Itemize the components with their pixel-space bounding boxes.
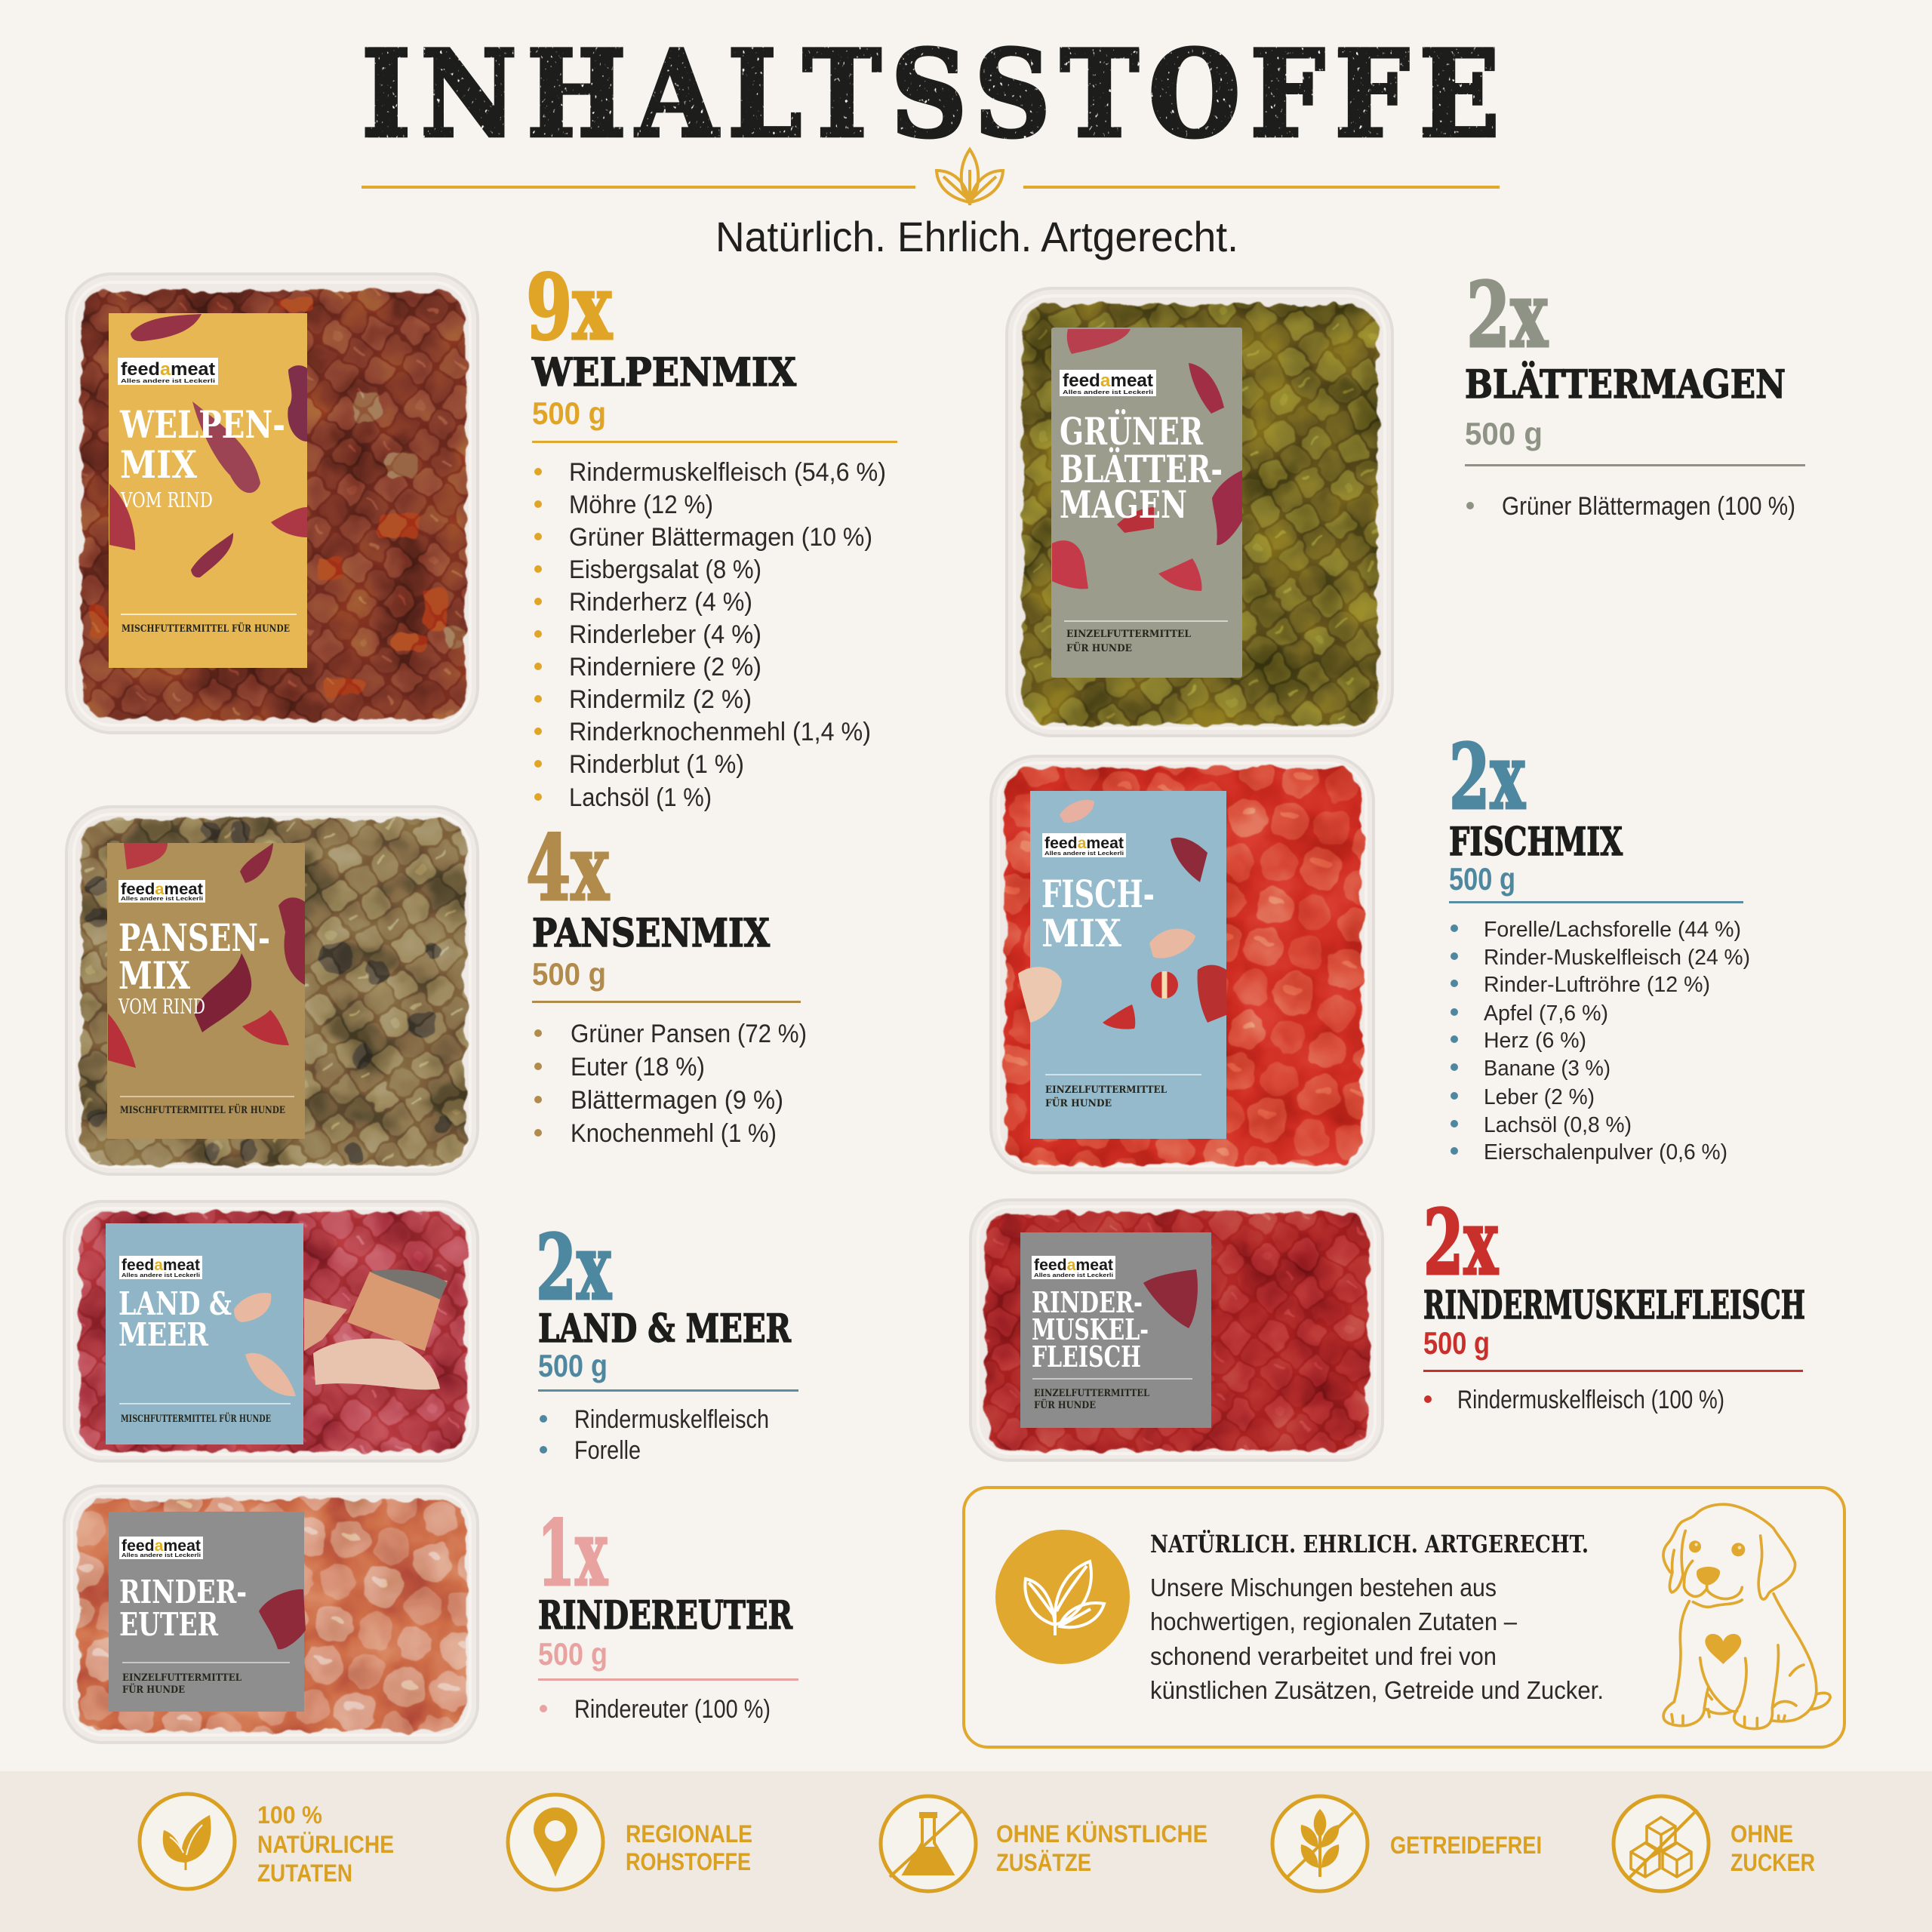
pack label: rindermuskelfleisch: [1020, 1232, 1211, 1428]
pack label: rindermuskelfleisch: EINZELFUTTERMITTEL: [1034, 1388, 1149, 1399]
callout body text: schonend verarbeitet und frei von: [1150, 1642, 1497, 1670]
product tray: rindereuter: [64, 1486, 478, 1743]
brand logo: feedameat: [1034, 1257, 1113, 1274]
section: rindermuskelfleisch: 500 g: [1423, 1325, 1490, 1361]
section: blaettermagen: BLÄTTERMAGEN: [1465, 361, 1786, 408]
ingredient list: fischmix: Banane (3 %): [1484, 1057, 1611, 1081]
brand logo: Alles andere ist Leckerli: [122, 1273, 200, 1278]
ingredient list: welpenmix: Rinderleber (4 %): [569, 620, 761, 649]
brand logo: Alles andere ist Leckerli: [122, 1553, 201, 1558]
badge: ohne kuenstliche zusaetze: ZUSÄTZE: [996, 1849, 1091, 1876]
callout body text: Unsere Mischungen bestehen aus: [1150, 1574, 1497, 1601]
callout body text: [1150, 1574, 1604, 1704]
pack label: fischmix: FÜR HUNDE: [1045, 1097, 1112, 1109]
icon: apple: [1151, 971, 1178, 998]
section: fischmix: 500 g: [1449, 861, 1515, 897]
pack label: gruener blaettermagen: EINZELFUTTERMITTEL: [1066, 629, 1191, 640]
product tray: fischmix: [991, 756, 1374, 1173]
brand logo: feedameat: [122, 1257, 200, 1274]
ingredient list: welpenmix: Lachsöl (1 %): [569, 783, 712, 812]
ingredient list: fischmix: Lachsöl (0,8 %): [1484, 1113, 1632, 1137]
section: pansenmix: [526, 816, 807, 1148]
pack label: rindereuter: RINDER-: [119, 1574, 247, 1611]
brand logo: [1042, 833, 1126, 857]
pack label: pansenmix: [107, 843, 305, 1139]
ingredient list: welpenmix: Rinderherz (4 %): [569, 588, 752, 617]
ingredient list: welpenmix: Möhre (12 %): [569, 491, 713, 519]
brand logo: feedameat: [121, 881, 203, 898]
callout panel: [964, 1487, 1844, 1747]
section: blaettermagen: 2x: [1466, 263, 1549, 368]
title divider with leaf: [361, 149, 1500, 205]
pack label: rindermuskelfleisch: FLEISCH: [1032, 1340, 1141, 1374]
ingredient list: fischmix: Rinder-Muskelfleisch (24 %): [1484, 946, 1750, 970]
product tray: rindermuskelfleisch: [971, 1200, 1383, 1460]
badge: ohne zucker: ZUCKER: [1730, 1849, 1815, 1876]
ingredient list: land und meer: [540, 1405, 769, 1465]
section: fischmix: FISCHMIX: [1449, 820, 1623, 865]
section: land und meer: [536, 1215, 798, 1465]
badge: natuerliche zutaten: ZUTATEN: [257, 1860, 352, 1887]
pack label: rindereuter: EINZELFUTTERMITTEL: [122, 1672, 242, 1684]
pack label: gruener blaettermagen: GRÜNER: [1060, 408, 1203, 454]
ingredient list: fischmix: Herz (6 %): [1484, 1029, 1586, 1053]
subtitle: Natürlich. Ehrlich. Artgerecht.: [715, 213, 1238, 260]
section: land und meer: 2x: [536, 1215, 612, 1321]
footer band: [0, 1771, 1932, 1932]
pack label: fischmix: EINZELFUTTERMITTEL: [1045, 1084, 1167, 1096]
ingredient list: pansenmix: [534, 1020, 807, 1148]
icon: leaves in circle: [995, 1530, 1130, 1664]
badge: regionale rohstoffe: ROHSTOFFE: [626, 1848, 751, 1875]
brand logo: feedameat: [121, 359, 215, 380]
pack label: pansenmix: VOM RIND: [118, 995, 205, 1019]
pack label: rindermuskelfleisch: RINDER-: [1032, 1285, 1143, 1319]
section: rindereuter: 1x: [537, 1501, 608, 1607]
pack label: welpenmix: WELPEN-: [119, 402, 285, 447]
badge: regionale rohstoffe: [508, 1795, 752, 1890]
product tray: land und meer: [64, 1201, 478, 1461]
pack label: rindermuskelfleisch: FÜR HUNDE: [1034, 1398, 1096, 1411]
brand logo: [1032, 1256, 1115, 1279]
pack label: fischmix: MIX: [1041, 911, 1121, 955]
section: blaettermagen: [1465, 263, 1805, 521]
section: fischmix: 2x: [1449, 724, 1526, 830]
ingredient list: land und meer: Rindermuskelfleisch: [574, 1405, 769, 1434]
badge: ohne zucker: OHNE: [1730, 1820, 1793, 1847]
pack label: pansenmix: MISCHFUTTERMITTEL FÜR HUNDE: [120, 1103, 285, 1116]
brand logo: Alles andere ist Leckerli: [1034, 1273, 1113, 1278]
ingredient list: welpenmix: Rinderniere (2 %): [569, 653, 761, 681]
section: rindereuter: 500 g: [538, 1636, 608, 1672]
title: INHALTSSTOFFE: [361, 25, 1500, 165]
pack label: rindereuter: EUTER: [119, 1606, 219, 1643]
pack label: fischmix: FISCH-: [1041, 872, 1155, 916]
section: rindermuskelfleisch: [1423, 1190, 1805, 1414]
section: welpenmix: WELPENMIX: [531, 350, 796, 395]
pack label: gruener blaettermagen: FÜR HUNDE: [1066, 641, 1132, 654]
pack label: welpenmix: MISCHFUTTERMITTEL FÜR HUNDE: [122, 622, 290, 635]
pack label: fischmix: [1018, 791, 1226, 1139]
section: blaettermagen: 500 g: [1465, 416, 1543, 451]
pack label: gruener blaettermagen: [1051, 328, 1242, 678]
ingredient list: fischmix: Rinder-Luftröhre (12 %): [1484, 973, 1710, 997]
section: welpenmix: 9x: [526, 255, 613, 361]
badge: ohne kuenstliche zusaetze: OHNE KÜNSTLICHE: [996, 1820, 1208, 1847]
ingredient list: pansenmix: Blättermagen (9 %): [571, 1086, 783, 1115]
section: pansenmix: 500 g: [532, 956, 606, 992]
product tray: pansenmix: [66, 807, 478, 1174]
section: pansenmix: PANSENMIX: [532, 911, 770, 956]
ingredient list: fischmix: Leber (2 %): [1484, 1085, 1595, 1109]
brand logo: feedameat: [1044, 835, 1124, 852]
brand logo: feedameat: [122, 1537, 201, 1555]
ingredient list: welpenmix: Grüner Blättermagen (10 %): [569, 523, 872, 552]
brand logo: Alles andere ist Leckerli: [1044, 851, 1124, 857]
ingredient list: land und meer: Forelle: [574, 1436, 641, 1465]
pack label: land und meer: MEER: [118, 1316, 209, 1353]
pack label: welpenmix: VOM RIND: [120, 489, 213, 512]
ingredient list: fischmix: Apfel (7,6 %): [1484, 1001, 1608, 1026]
section: fischmix: [1449, 724, 1750, 1164]
ingredient list: pansenmix: Euter (18 %): [571, 1053, 705, 1081]
pack label: land und meer: [106, 1223, 303, 1444]
pack label: pansenmix: MIX: [118, 953, 190, 998]
ingredient list: welpenmix: [534, 458, 886, 812]
pack label: gruener blaettermagen: BLÄTTER-: [1060, 446, 1223, 491]
callout heading: NATÜRLICH. EHRLICH. ARTGERECHT.: [1150, 1529, 1589, 1558]
ingredient list: pansenmix: Grüner Pansen (72 %): [571, 1020, 807, 1048]
section: welpenmix: 500 g: [532, 395, 606, 431]
badge: natuerliche zutaten: 100 %: [257, 1801, 322, 1829]
pack label: land und meer: MISCHFUTTERMITTEL FÜR HUNDE: [121, 1412, 271, 1425]
pack label: gruener blaettermagen: MAGEN: [1060, 482, 1187, 527]
section: rindermuskelfleisch: 2x: [1423, 1190, 1499, 1296]
pack label: welpenmix: MIX: [120, 442, 197, 487]
icon: puppy: [1663, 1504, 1830, 1729]
brand logo: [118, 358, 218, 385]
salmon pieces: [304, 1269, 448, 1390]
section: rindereuter: [537, 1501, 798, 1724]
badge: natuerliche zutaten: NATÜRLICHE: [257, 1831, 394, 1858]
section: welpenmix: [526, 255, 897, 812]
ingredient list: welpenmix: Eisbergsalat (8 %): [569, 555, 761, 584]
badge: getreidefrei: GETREIDEFREI: [1390, 1832, 1542, 1859]
ingredient list: rindereuter: Rindereuter (100 %): [574, 1695, 771, 1724]
badge: regionale rohstoffe: REGIONALE: [626, 1820, 752, 1847]
ingredient list: welpenmix: Rinderknochenmehl (1,4 %): [569, 718, 871, 746]
product tray: welpenmix: [66, 274, 478, 733]
pack label: rindereuter: [109, 1512, 306, 1712]
pack label: rindereuter: FÜR HUNDE: [122, 1683, 185, 1696]
brand logo: Alles andere ist Leckerli: [121, 897, 203, 902]
badge: ohne kuenstliche zusaetze: [881, 1796, 1208, 1891]
ingredient list: rindermuskelfleisch: Rindermuskelfleisch (100 %): [1457, 1386, 1724, 1414]
ingredient list: welpenmix: Rindermilz (2 %): [569, 685, 752, 714]
product tray: gruener blaettermagen: [1007, 288, 1392, 736]
ingredient list: fischmix: Forelle/Lachsforelle (44 %): [1484, 918, 1741, 942]
ingredient list: pansenmix: Knochenmehl (1 %): [571, 1119, 777, 1148]
brand logo: Alles andere ist Leckerli: [1063, 390, 1153, 395]
pack label: rindermuskelfleisch: MUSKEL-: [1032, 1312, 1149, 1346]
callout body text: hochwertigen, regionalen Zutaten –: [1150, 1607, 1518, 1635]
ingredient list: fischmix: Eierschalenpulver (0,6 %): [1484, 1140, 1727, 1164]
badge: getreidefrei: [1272, 1796, 1542, 1891]
ingredient list: blaettermagen: Grüner Blättermagen (100 %): [1502, 492, 1795, 521]
pack label: land und meer: LAND &: [118, 1285, 232, 1322]
brand logo: feedameat: [1063, 371, 1153, 391]
ingredient list: fischmix: [1451, 918, 1750, 1164]
brand logo: Alles andere ist Leckerli: [121, 379, 215, 384]
callout body text: künstlichen Zusätzen, Getreide und Zucker.: [1150, 1676, 1604, 1704]
pack label: pansenmix: PANSEN-: [118, 915, 270, 960]
section: land und meer: 500 g: [538, 1348, 608, 1383]
badge: natuerliche zutaten: [140, 1794, 394, 1889]
ingredient list: welpenmix: Rinderblut (1 %): [569, 750, 744, 779]
section: rindereuter: RINDEREUTER: [538, 1593, 792, 1638]
badge: ohne zucker: [1614, 1796, 1815, 1891]
pack label: welpenmix: [109, 313, 307, 668]
ingredient list: welpenmix: Rindermuskelfleisch (54,6 %): [569, 458, 886, 487]
section: land und meer: LAND & MEER: [538, 1306, 791, 1352]
section: pansenmix: 4x: [526, 816, 610, 921]
